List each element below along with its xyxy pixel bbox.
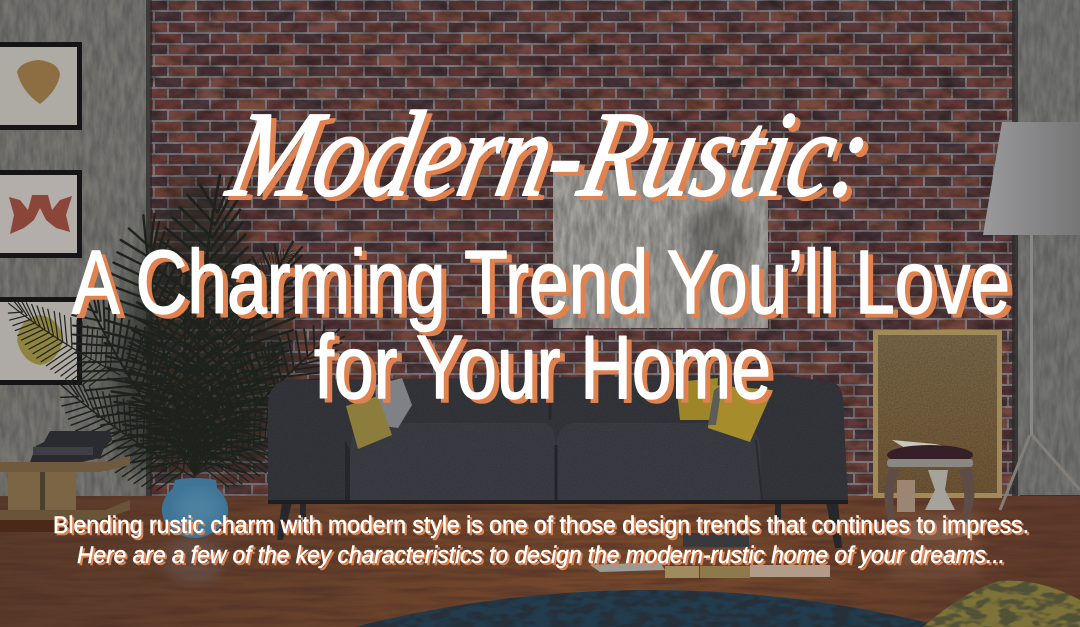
sofa cushions: [346, 378, 773, 449]
title: Modern-Rustic: Modern-Rustic:: [217, 86, 883, 222]
intro text line 2: Here are a few of the key characteristics to design the modern-rustic home of your dreams...: [77, 542, 1005, 569]
heading line 2: for Your Home: [319, 322, 776, 422]
books on the floor: [590, 533, 830, 578]
floor lamp: [983, 122, 1080, 510]
patterned round rug: [355, 590, 945, 627]
title: Modern-Rustic: Modern-Rustic:: [222, 90, 888, 226]
framed print: brown leaf: [0, 42, 82, 130]
framed print: yellow leaf: [0, 297, 82, 385]
heading line 2: for Your Home: [314, 318, 771, 418]
intro text line 1: Blending rustic charm with modern style is one of those design trends that continues to impress.: [53, 512, 1029, 539]
jute board: [873, 330, 1002, 498]
right concrete column: [1012, 0, 1080, 500]
palm plant: [0, 170, 360, 508]
wooden floor: [0, 496, 1080, 627]
round stool with books: [884, 440, 975, 540]
grey sofa: [268, 375, 848, 548]
left concrete wall: [0, 0, 152, 510]
intro text line 1: Blending rustic charm with modern style is one of those design trends that continues to impress.: [55, 514, 1031, 541]
central wall artwork: [553, 170, 768, 328]
framed print: red leaf: [0, 170, 82, 258]
background: brick wall: [150, 0, 1020, 510]
intro text line 2: Here are a few of the key characteristics to design the modern-rustic home of your dreams...: [79, 544, 1007, 571]
floor cushion: [923, 578, 1080, 627]
side table with typewriter: [0, 431, 130, 532]
blue vase: [162, 478, 228, 538]
